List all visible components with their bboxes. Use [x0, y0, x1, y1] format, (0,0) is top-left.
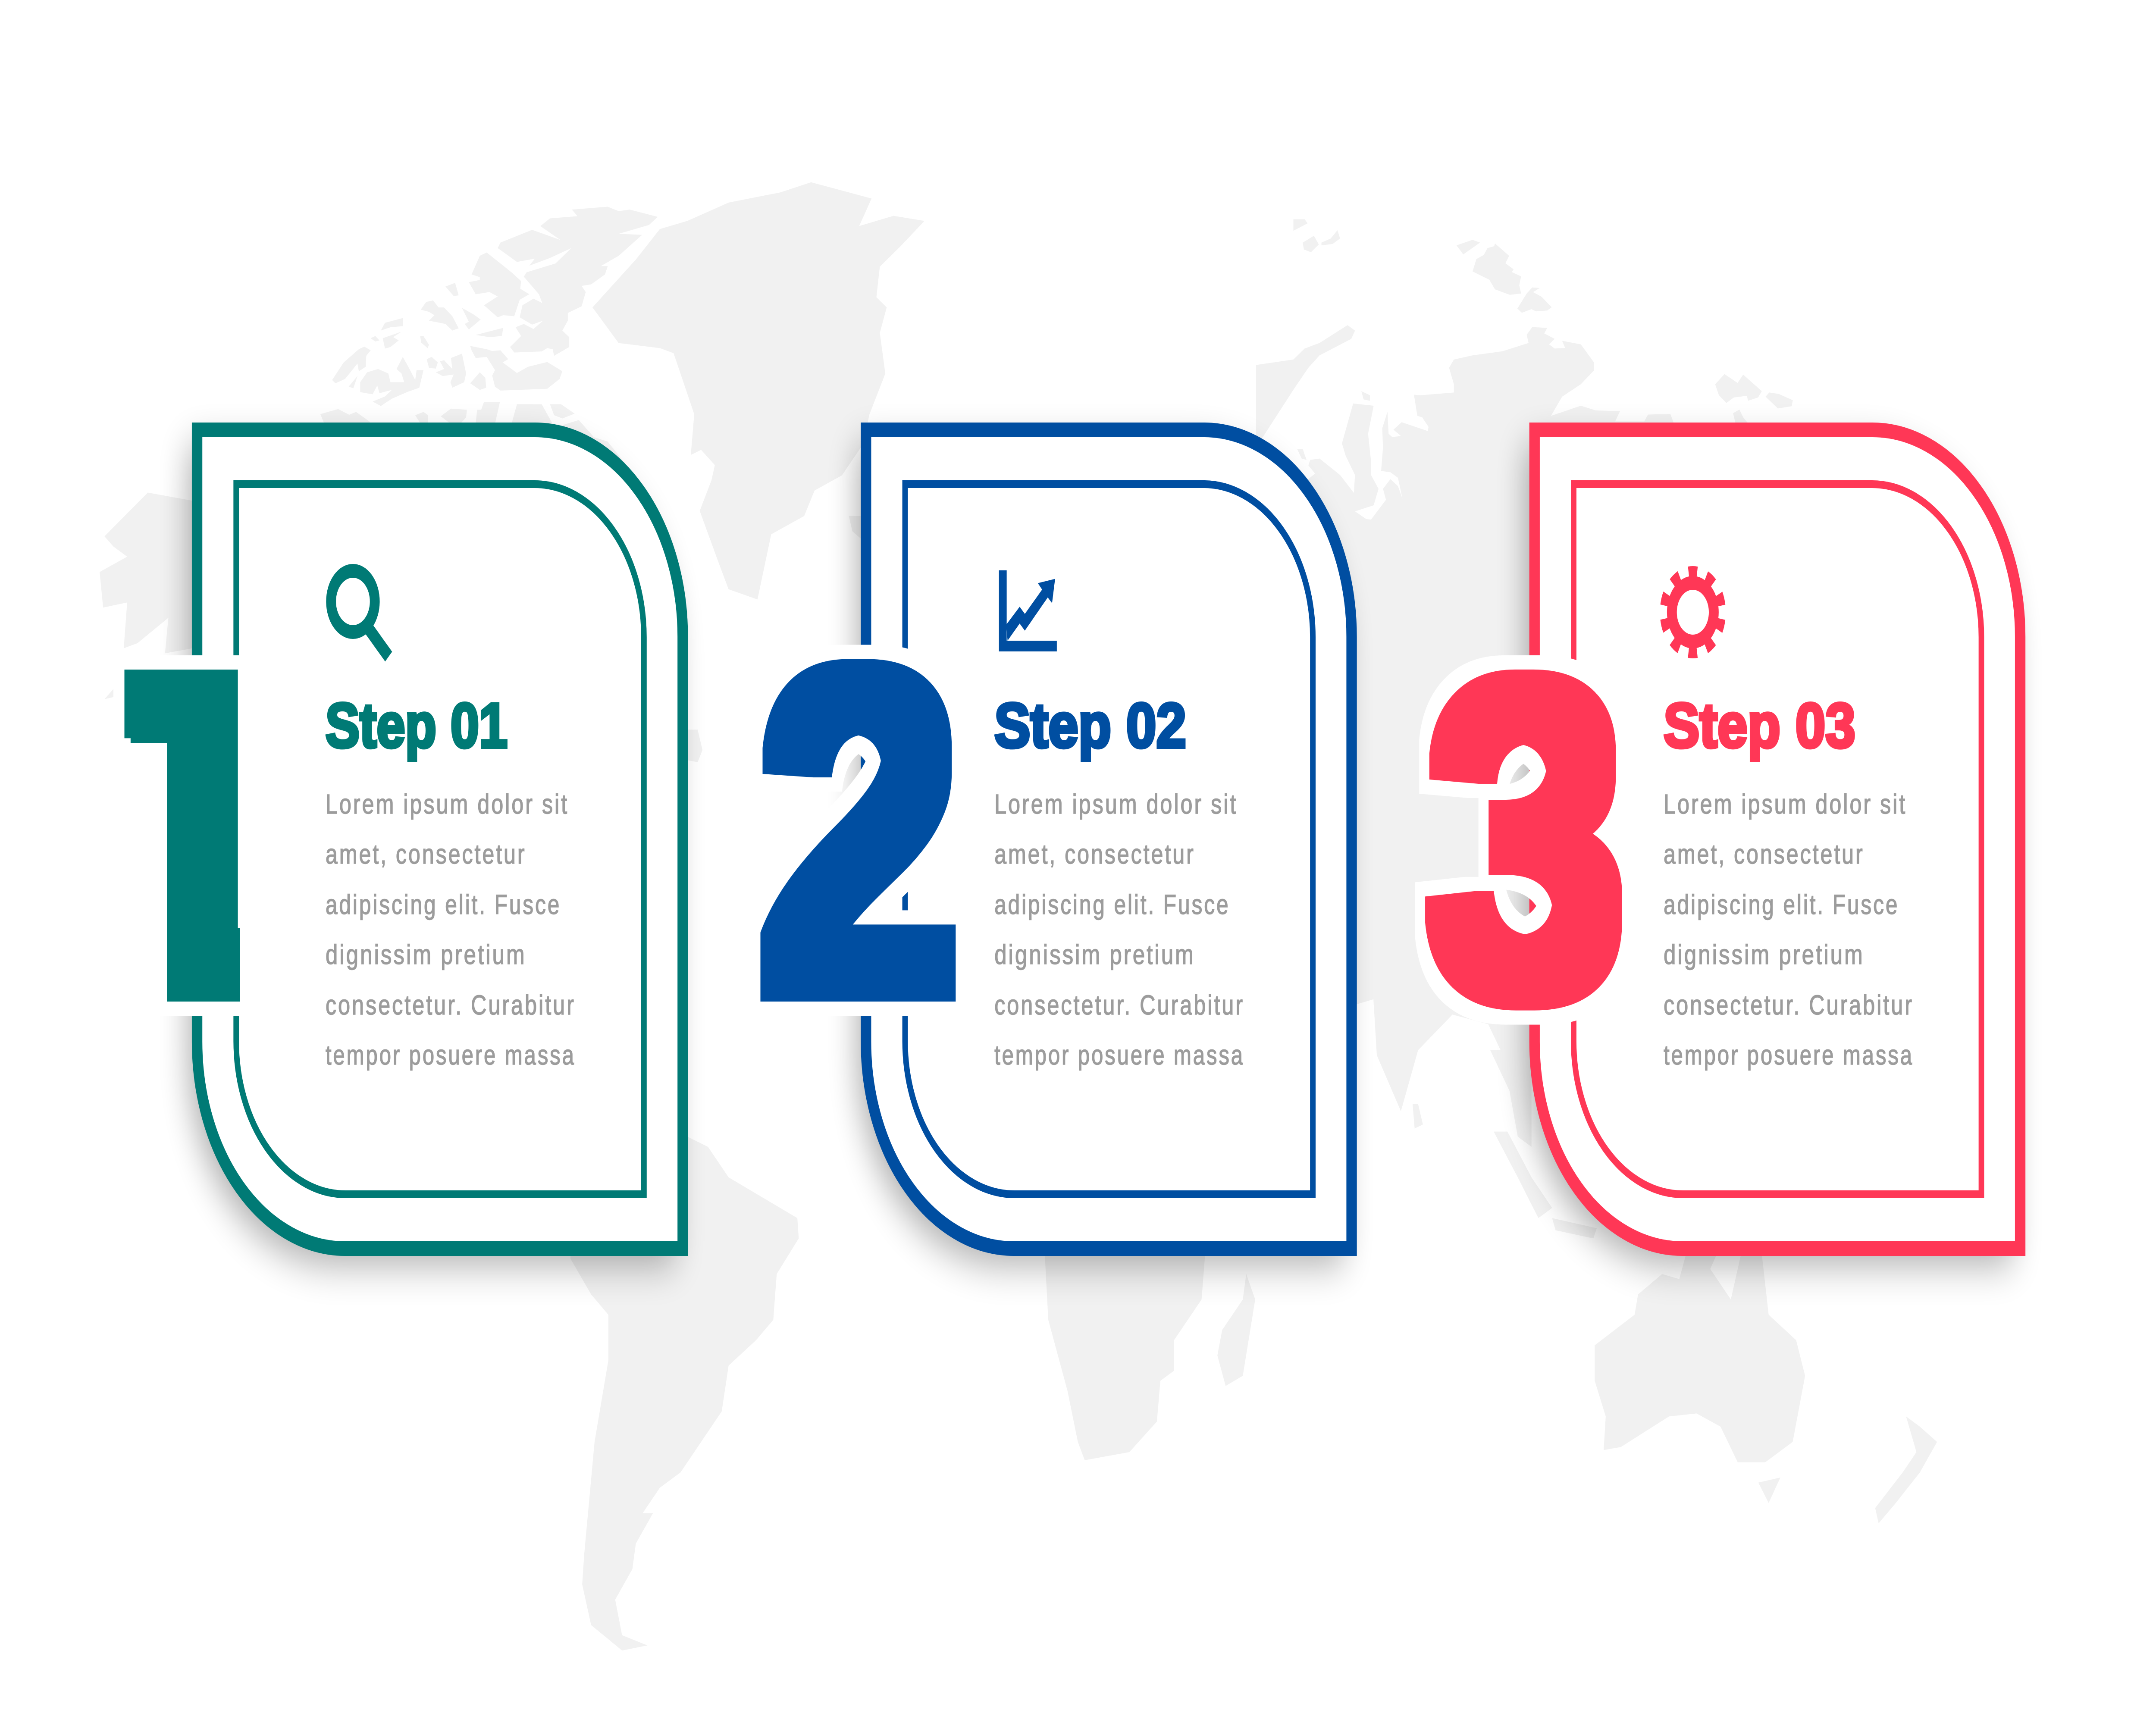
- map: Asia, Africa, Australia and islands: [1045, 577, 1937, 1523]
- heading: step 01: Step 01: [326, 690, 508, 761]
- numeral 3: 3: [1426, 591, 1626, 1087]
- world map silhouette: [100, 182, 1937, 1650]
- outer frame: [1535, 430, 2020, 1249]
- body text: step 1: [326, 789, 576, 1071]
- body text: step 3: Lorem ipsum dolor sit: [1664, 789, 1907, 820]
- inner frame: [1573, 484, 1981, 1194]
- card shadow: [189, 445, 675, 1264]
- body text: step 2: adipiscing elit. Fusce: [994, 889, 1230, 920]
- body text: step 3: [1664, 789, 1914, 1071]
- body text: step 1: consectetur. Curabitur: [326, 989, 576, 1021]
- body text: step 3: tempor posuere massa: [1664, 1039, 1914, 1071]
- card shadow: [858, 445, 1344, 1264]
- outer frame: [866, 430, 1352, 1249]
- body text: step 3: adipiscing elit. Fusce: [1664, 889, 1899, 920]
- body text: step 1: Lorem ipsum dolor sit: [326, 789, 569, 820]
- panel: step 3 card: [1526, 430, 2020, 1264]
- map: northern Eurasia: [1256, 219, 1793, 604]
- numeral 2: 2: [757, 578, 961, 1085]
- body text: step 2: Lorem ipsum dolor sit: [994, 789, 1238, 820]
- icon: gear: [1660, 566, 1726, 658]
- body text: step 2: consectetur. Curabitur: [994, 989, 1244, 1021]
- heading: step 02: Step 02: [994, 690, 1186, 761]
- inner frame: [236, 484, 644, 1194]
- card shadow: [1526, 445, 2012, 1264]
- body text: step 2: amet, consectetur: [994, 839, 1195, 870]
- map: Canadian arctic islands: [320, 207, 658, 474]
- body text: step 2: tempor posuere massa: [994, 1039, 1244, 1071]
- body text: step 1: adipiscing elit. Fusce: [326, 889, 561, 920]
- body text: step 1: tempor posuere massa: [326, 1039, 576, 1071]
- body text: step 2: dignissim pretium: [994, 939, 1195, 970]
- body text: step 3: dignissim pretium: [1664, 939, 1865, 970]
- inner frame: [905, 484, 1313, 1194]
- panel: step 1 card: [189, 430, 683, 1264]
- body text: step 1: dignissim pretium: [326, 939, 526, 970]
- body text: step 1: amet, consectetur: [326, 839, 526, 870]
- body text: step 3: amet, consectetur: [1664, 839, 1865, 870]
- body text: step 2: [994, 789, 1244, 1071]
- icon: growth chart: [999, 570, 1057, 651]
- body text: step 3: consectetur. Curabitur: [1664, 989, 1914, 1021]
- icon: magnifying glass: [331, 571, 389, 657]
- map: Greenland, Alaska, South America and nearby land: [100, 182, 924, 1650]
- heading: step 03: Step 03: [1664, 690, 1855, 761]
- panel: step 2 card: [858, 430, 1352, 1264]
- outer frame: [197, 430, 683, 1249]
